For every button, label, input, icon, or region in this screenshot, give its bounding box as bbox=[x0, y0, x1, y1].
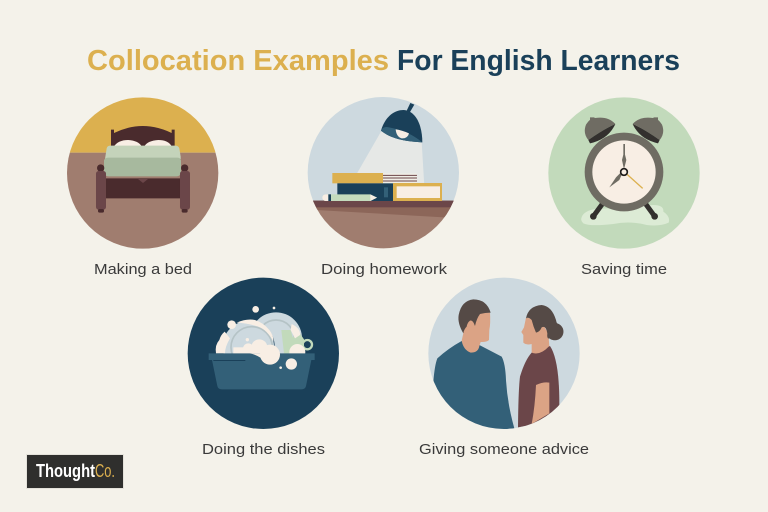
label: doing the dishes: Doing the dishes bbox=[202, 441, 325, 458]
panel: saving time bbox=[548, 97, 700, 249]
icon: books and pencil bbox=[322, 173, 442, 201]
logo: ThoughtCo bbox=[26, 454, 124, 488]
label: giving someone advice: Giving someone advice bbox=[419, 441, 589, 458]
title bbox=[87, 45, 680, 77]
logo: ThoughtCo: Co. bbox=[95, 461, 115, 481]
icon: man bbox=[433, 299, 514, 433]
panel: making a bed bbox=[63, 95, 223, 253]
icon: woman bbox=[518, 305, 563, 427]
panel: doing homework bbox=[305, 95, 462, 254]
icon: bed bbox=[96, 126, 190, 213]
logo: ThoughtCo: Thought bbox=[36, 461, 95, 481]
title: Collocation Examples bbox=[87, 45, 389, 77]
title: For English Learners bbox=[397, 45, 680, 77]
panel: giving someone advice bbox=[427, 277, 583, 433]
icon: dishes in tub bbox=[209, 306, 315, 389]
label: making a bed: Making a bed bbox=[94, 261, 192, 278]
panel: doing the dishes bbox=[188, 278, 339, 429]
label: doing homework: Doing homework bbox=[321, 261, 448, 278]
icon: lamp bbox=[381, 103, 422, 142]
label: saving time: Saving time bbox=[581, 261, 667, 278]
infographic bbox=[26, 49, 700, 489]
icon: alarm clock bbox=[585, 117, 663, 220]
